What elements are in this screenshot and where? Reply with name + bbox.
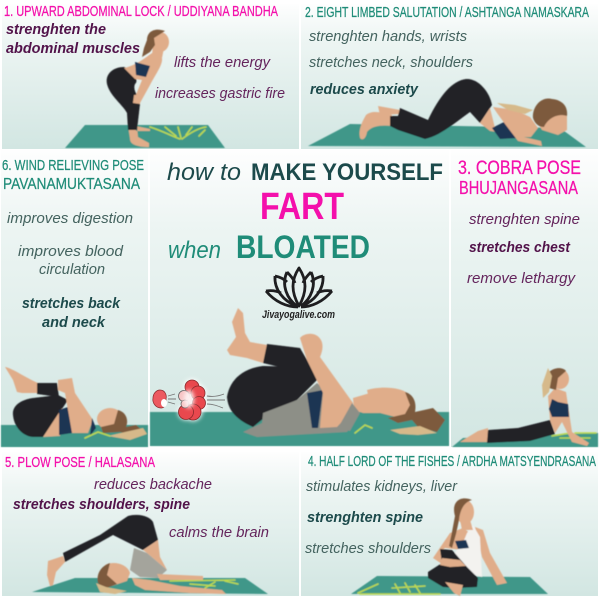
figure: eight limbed pose on mat [308, 79, 586, 147]
panel: 4 half lord of the fishes [301, 452, 598, 596]
benefit: chest: stretches chest [469, 239, 571, 256]
title: how to make yourself: MAKE YOURSELF [251, 159, 443, 186]
benefit: strengthen abdominal: strenghten the [6, 21, 106, 38]
title: when bloated: when [168, 237, 221, 264]
title: when bloated: BLOATED [236, 229, 370, 265]
title: how to make yourself: how to [167, 159, 241, 186]
benefit: digestion: improves digestion [7, 210, 133, 227]
panel: center title [150, 150, 449, 446]
benefit: stretches back and neck: and neck [42, 314, 106, 331]
panel: 3 cobra pose [451, 150, 598, 447]
heading: pose 6: 6. WIND RELIEVING POSE [2, 157, 144, 174]
benefit: hands, wrists: strenghten hands, wrists [309, 28, 467, 45]
heading: pavanamuktasana: PAVANAMUKTASANA [3, 176, 140, 193]
figure: wind relieving pose large [150, 308, 449, 446]
figure: cobra pose [452, 368, 598, 447]
benefit: strengthen abdominal: abdominal muscles [6, 40, 140, 57]
figure: plow pose [32, 515, 268, 594]
heading: pose 5: 5. PLOW POSE / HALASANA [5, 454, 155, 471]
figure: standing forward bend on mat [65, 30, 225, 148]
benefit: backache: reduces backache [94, 476, 212, 493]
logo: wordmark: Jivayogalive.com [262, 309, 335, 321]
benefit: lethargy: remove lethargy [467, 270, 576, 287]
benefit: spine: strenghten spine [469, 211, 580, 228]
benefit: kidneys, liver: stimulates kidneys, liver [306, 478, 458, 495]
benefit: blood circulation: circulation [39, 261, 105, 278]
heading: pose 1: 1. UPWARD ABDOMINAL LOCK / UDDIYANA BANDHA [4, 3, 278, 20]
icon: fart cloud big [178, 379, 207, 421]
benefit: gastric fire: increases gastric fire [155, 85, 285, 102]
figure: wind relieving pose small [1, 367, 148, 447]
icon: fart cloud small [153, 390, 167, 408]
panel: 5 plow pose [2, 452, 299, 596]
benefit: stretches back and neck: stretches back [22, 295, 121, 312]
panel: 1 upward abdominal lock [2, 3, 299, 149]
panel: 2 eight limbed salutation [301, 4, 598, 149]
benefit: reduces anxiety: reduces anxiety [310, 81, 419, 98]
benefit: shoulders: stretches shoulders [305, 540, 431, 557]
figure: seated twist [351, 498, 548, 596]
heading: pose 3: 3. COBRA POSE [458, 158, 581, 179]
benefit: blood circulation: improves blood [18, 243, 124, 260]
icon: wind lines [168, 394, 225, 408]
benefit: lifts the energy: lifts the energy [174, 54, 271, 71]
panel: 6 wind relieving pose [1, 150, 148, 447]
benefit: shoulders, spine: stretches shoulders, spine [13, 496, 190, 513]
benefit: neck, shoulders: stretches neck, shoulders [309, 54, 473, 71]
benefit: calms brain: calms the brain [169, 524, 269, 541]
title: fart: FART [260, 186, 344, 228]
benefit: spine: strenghten spine [307, 509, 423, 526]
logo: lotus [266, 268, 332, 307]
